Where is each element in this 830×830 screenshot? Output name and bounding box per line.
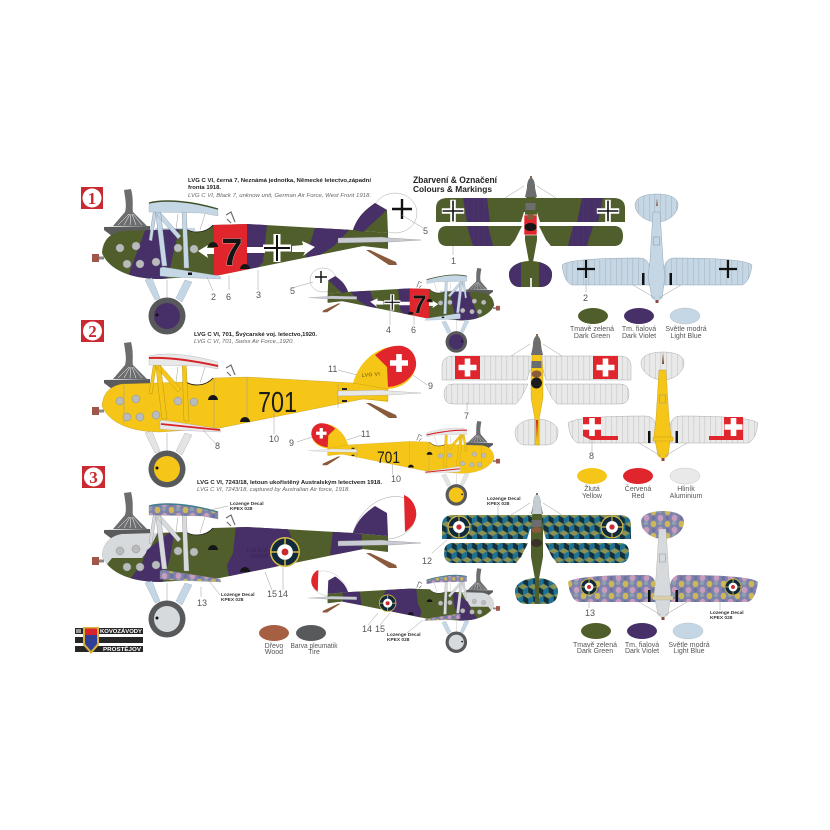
swatches: scheme 1: Tmavě zelená (570, 326, 614, 333)
swatches: wood and tire: Wood (265, 649, 283, 656)
callout: tail cross detail, small plane 1 (310, 268, 336, 292)
side view: plane 3 large (92, 492, 421, 638)
numbered callouts: scheme 1: 1 (451, 256, 456, 266)
numbered callouts: scheme 1: 5 (290, 286, 295, 296)
badge: scheme 1 (81, 187, 103, 209)
swatches: scheme 3: Dark Green (577, 648, 613, 655)
plan view: plane 1 top (436, 176, 625, 290)
numbered callouts: scheme 3: 15 (375, 624, 385, 634)
numbered callouts: scheme 1: 4 (386, 325, 391, 335)
numbered callouts: scheme 1: 6 (411, 325, 416, 335)
numbered callouts: scheme 1: 6 (226, 292, 231, 302)
numbered callouts: scheme 1: 5 (423, 226, 428, 236)
numbered callouts: scheme 2 (203, 364, 594, 484)
plan view: plane 2 underside (568, 352, 758, 461)
numbered callouts: scheme 1: 3 (256, 290, 261, 300)
labels: lozenge decal notes: KPEX 028 (387, 637, 410, 643)
plan view: plane 3 top (442, 493, 631, 604)
heading: colours and markings: Colours & Markings (413, 184, 492, 194)
numbered callouts: scheme 2: 11 (328, 364, 337, 374)
marking: serial on fuselage (247, 548, 268, 560)
side view: plane 1 large (92, 189, 421, 334)
side view: plane 1 small (308, 268, 500, 353)
labels: lozenge decal notes: Lozenge Decal (230, 501, 264, 507)
caption: scheme 3: LVG C VI, 7243/18, captured by Australian Air force, 1918. (197, 487, 350, 493)
numbered callouts: scheme 1 (207, 215, 588, 335)
marking: 701 small: 701 (377, 448, 400, 467)
labels: lozenge decal notes: Lozenge Decal (487, 496, 521, 502)
swatches: scheme 1: Dark Violet (622, 333, 656, 340)
swatches: wood and tire (259, 625, 338, 656)
swatches: wood and tire: Tire (308, 649, 320, 656)
marking: serial on fuselage: 7243/18 (250, 554, 268, 560)
swatches: scheme 3: Světle modrá (668, 642, 710, 649)
numbered callouts: scheme 2: 8 (589, 451, 594, 461)
swatches: scheme 2: Yellow (582, 493, 603, 500)
callout: tail cross detail, plane 1 (373, 193, 417, 233)
numbered callouts: scheme 3: 15 (267, 589, 277, 599)
numbered callouts: scheme 2: 7 (464, 411, 469, 421)
swatches: scheme 1 (570, 308, 707, 340)
labels: lozenge decal notes: KPEX 028 (230, 506, 253, 512)
labels: lozenge decal notes: KPEX 028 (710, 615, 733, 621)
swatches: scheme 2 (577, 468, 703, 500)
numbered callouts: scheme 3: 14 (278, 589, 288, 599)
labels: lozenge decal notes: Lozenge Decal (221, 592, 255, 598)
swatches: wood and tire: Dřevo (265, 643, 283, 650)
swatches: scheme 1: Světle modrá (665, 326, 707, 333)
swatches: scheme 3: Tmavě zelená (573, 642, 617, 649)
numbered callouts: scheme 2: 10 (391, 474, 401, 484)
swatches: scheme 2: Žlutá (584, 484, 600, 493)
labels: lozenge decal notes: KPEX 028 (221, 597, 244, 603)
numbered callouts: scheme 3 (197, 505, 720, 634)
swatches: scheme 3: Light Blue (673, 648, 705, 655)
logo: Kovozávody Prostějov: KOVOZÁVODY (100, 628, 143, 635)
badge: scheme 2: 2 (88, 322, 97, 341)
caption: scheme 3: LVG C VI, 7243/18, letoun ukořistěný Australským letectvem 1918. (197, 480, 382, 486)
badge: scheme 3 (82, 466, 105, 488)
caption: scheme 1: fronta 1918. (188, 185, 221, 191)
labels: lozenge decal notes: Lozenge Decal (387, 632, 421, 638)
marking: serial on fuselage: LVG C VI (247, 548, 268, 554)
swatches: wood and tire: Barva pleumatik (290, 643, 338, 650)
caption: scheme 1 (188, 178, 371, 199)
labels: lozenge decal notes: Lozenge Decal (710, 610, 744, 616)
caption: scheme 1: LVG C VI, Black 7, unknow unit, German Air Force, West Front 1918. (188, 193, 371, 199)
marking: number 7 large: 7 (221, 232, 243, 274)
badge: scheme 2 (81, 320, 104, 342)
side view: plane 2 large (92, 342, 421, 488)
swatches: scheme 1: Light Blue (670, 333, 702, 340)
plan view: plane 2 top (442, 334, 631, 445)
logo: Kovozávody Prostějov (75, 627, 143, 654)
swatches: scheme 3 (573, 623, 710, 655)
side view: plane 2 small (308, 421, 500, 506)
caption: scheme 2: LVG C VI, 701, Švýcarské voj. letectvo,1920. (194, 330, 317, 338)
numbered callouts: scheme 1: 2 (583, 293, 588, 303)
numbered callouts: scheme 2: 10 (269, 434, 279, 444)
numbered callouts: scheme 3: 13 (585, 608, 595, 618)
labels: lozenge decal notes (221, 496, 744, 643)
numbered callouts: scheme 2: 8 (215, 441, 220, 451)
plan view: plane 1 underside (562, 194, 752, 303)
numbered callouts: scheme 1: 2 (211, 292, 216, 302)
swatches: scheme 2: Hliník (677, 486, 695, 493)
heading: colours and markings: Zbarvení & Označení (413, 175, 498, 185)
caption: scheme 1: LVG C VI, černá 7, Neznámá jednotka, Německé letectvo,západní (188, 178, 371, 184)
caption: scheme 2 (194, 330, 317, 345)
caption: scheme 2: LVG C VI, 701, Swiss Air Force.,1920. (194, 339, 294, 345)
swatches: scheme 3: Tm. fialová (625, 642, 659, 649)
caption: scheme 3 (197, 480, 382, 493)
marking: number 7 small: 7 (413, 291, 426, 319)
badge: scheme 3: 3 (89, 468, 98, 487)
marking: LVG VI on fin: LVG VI (362, 371, 380, 379)
heading: colours and markings (413, 175, 498, 194)
swatches: scheme 2: Red (632, 493, 645, 500)
numbered callouts: scheme 2: 9 (428, 381, 433, 391)
plan view: plane 3 underside (568, 511, 758, 620)
swatches: scheme 1: Tm. fialová (622, 326, 656, 333)
logo: Kovozávody Prostějov: PROSTĚJOV (103, 645, 142, 653)
marking: 701 large: 701 (258, 387, 297, 419)
badge: scheme 1: 1 (88, 189, 96, 208)
numbered callouts: scheme 2: 11 (361, 429, 370, 439)
numbered callouts: scheme 3: 13 (197, 598, 207, 608)
numbered callouts: scheme 2: 9 (289, 438, 294, 448)
swatches: scheme 1: Dark Green (574, 333, 610, 340)
swatches: scheme 2: Červená (625, 484, 651, 493)
numbered callouts: scheme 3: 12 (422, 556, 432, 566)
swatches: scheme 3: Dark Violet (625, 648, 659, 655)
numbered callouts: scheme 3: 14 (362, 624, 372, 634)
labels: lozenge decal notes: KPEX 028 (487, 501, 510, 507)
side view: plane 3 small (308, 568, 500, 653)
swatches: scheme 2: Aluminium (670, 493, 703, 500)
